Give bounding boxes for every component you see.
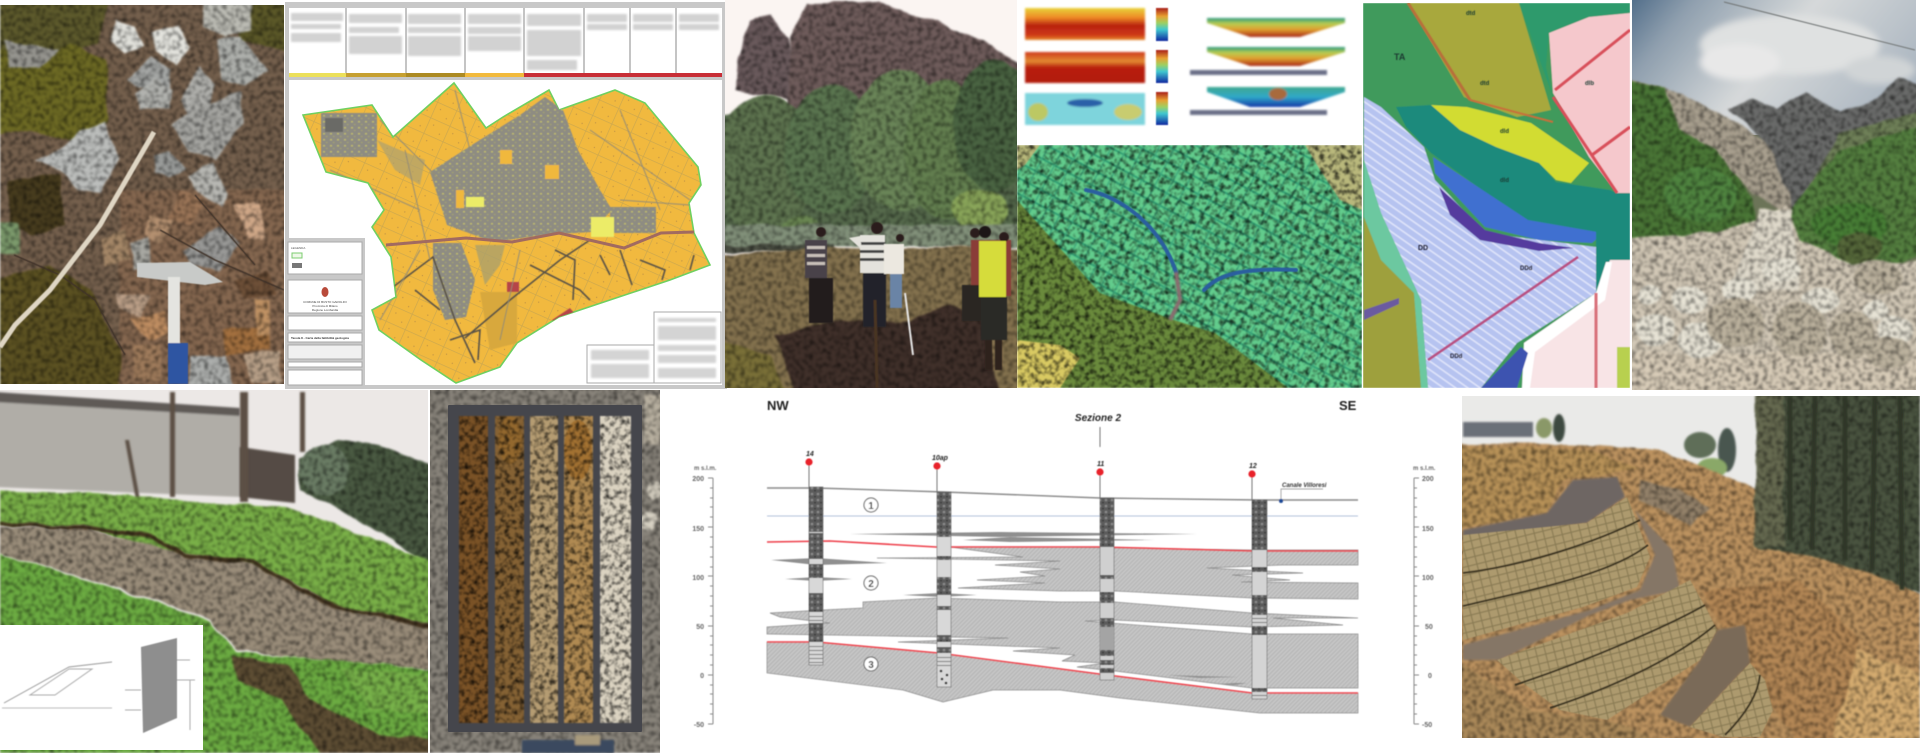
unit labels: DD bbox=[1418, 245, 1428, 252]
left elevation axis: m s.l.m. bbox=[694, 466, 717, 472]
mountain walls bbox=[1632, 76, 1916, 210]
legend table header with eight columns bbox=[289, 8, 722, 77]
fault lines bbox=[1408, 3, 1630, 388]
title block: municipality bbox=[288, 280, 362, 313]
photo: geotextile gabion retaining wall bbox=[1450, 390, 1920, 750]
core box frame bbox=[448, 405, 642, 732]
panel: geological feasibility map bbox=[285, 2, 727, 389]
title block: municipality: Provincia di Milano bbox=[312, 304, 338, 308]
left elevation axis: 100 bbox=[692, 575, 704, 582]
building bbox=[0, 392, 295, 503]
core columns bbox=[459, 416, 631, 723]
borehole 14 bbox=[805, 451, 823, 665]
group behind bbox=[962, 228, 1011, 321]
feasibility class colour strip bbox=[289, 73, 722, 77]
title block: municipality: COMUNE DI BUSTO GAROLFO bbox=[303, 300, 348, 304]
panel: geophysical tomography results bbox=[1017, 4, 1362, 145]
unit labels: dlb bbox=[1585, 81, 1594, 87]
road network bbox=[393, 240, 694, 363]
title block: sheet title: Tavola 8 - Carta della fattibilità geologica bbox=[291, 336, 349, 340]
unit number 2: 2 bbox=[868, 579, 874, 590]
section title and orientation: Sezione 2 bbox=[1075, 413, 1121, 424]
title block: municipality: Regione Lombardia bbox=[312, 308, 338, 312]
photo: field survey team below rock dome bbox=[725, 0, 1017, 388]
lower gabion tier bbox=[1690, 663, 1773, 737]
upper grass bbox=[0, 490, 440, 630]
right elevation axis: 0 bbox=[1428, 673, 1432, 680]
unit labels: dtd bbox=[1480, 81, 1490, 87]
geological hammer bbox=[137, 262, 223, 384]
notes boxes bbox=[587, 312, 721, 383]
surveyors bbox=[805, 222, 1011, 388]
upper gabion tier bbox=[1463, 497, 1650, 640]
central gully bbox=[1170, 272, 1180, 320]
canal label bbox=[1279, 483, 1327, 503]
secondary roads bbox=[330, 90, 690, 340]
canal label: Canale Villoresi bbox=[1282, 483, 1327, 489]
unit labels: DDd bbox=[1450, 354, 1463, 360]
thin lenses bbox=[771, 532, 1247, 685]
panel: topographic map with drainage lines bbox=[1017, 145, 1362, 388]
slump scarp and bare soil bbox=[0, 528, 440, 670]
left elevation axis: 200 bbox=[692, 476, 704, 483]
borehole 14: 14 bbox=[806, 451, 814, 458]
middle gabion tier bbox=[1497, 580, 1717, 720]
forest trunks bbox=[1790, 396, 1902, 590]
rock domes bbox=[734, 0, 1017, 110]
unit labels bbox=[1394, 11, 1594, 360]
lower grass bbox=[0, 550, 440, 753]
branches bbox=[14, 195, 284, 355]
map base colours bbox=[1017, 145, 1362, 388]
main canal line bbox=[386, 232, 694, 248]
right elevation axis: m s.l.m. bbox=[1413, 466, 1436, 472]
unit labels: dld bbox=[1500, 178, 1509, 184]
left elevation axis: 150 bbox=[692, 526, 704, 533]
borehole 12: 12 bbox=[1249, 463, 1257, 470]
surveyor in white shirt bbox=[884, 234, 904, 308]
valley backing bbox=[1726, 135, 1916, 265]
photo: shallow landslide on grassy slope bbox=[0, 390, 440, 753]
map sheet white field bbox=[365, 80, 722, 385]
column text blocks bbox=[291, 13, 719, 70]
geological units bbox=[1363, 3, 1630, 388]
sky bbox=[1462, 396, 1920, 738]
unit number 2 bbox=[864, 576, 878, 590]
sky bbox=[0, 390, 428, 753]
green vegetation bbox=[1623, 78, 1920, 270]
municipal territory map bbox=[303, 83, 710, 383]
borehole 10ap: 10ap bbox=[932, 455, 949, 462]
red stratigraphic boundaries bbox=[767, 541, 1358, 693]
colour scale bars bbox=[1156, 8, 1168, 125]
left elevation axis: -50 bbox=[694, 722, 704, 729]
unit number 3: 3 bbox=[868, 660, 874, 671]
right elevation axis bbox=[1413, 466, 1436, 729]
tomography sections right column bbox=[1190, 18, 1345, 115]
measuring pole bbox=[905, 293, 913, 355]
section title and orientation bbox=[767, 398, 1357, 447]
unit labels: dld bbox=[1500, 129, 1509, 135]
unit number 1: 1 bbox=[868, 501, 874, 512]
map sheet frame bbox=[285, 2, 727, 389]
excavated ground bbox=[1450, 442, 1920, 750]
surveyor in striped shirt, left bbox=[805, 227, 833, 323]
legend box bbox=[288, 242, 362, 274]
borehole 12 bbox=[1248, 463, 1267, 699]
built-up areas bbox=[321, 97, 656, 350]
right elevation axis: 50 bbox=[1425, 624, 1433, 631]
trees on the right bbox=[300, 440, 440, 570]
panel: coloured geological map bbox=[1363, 3, 1630, 388]
unit labels: DDd bbox=[1520, 266, 1533, 272]
forest floor and rocks bbox=[0, 5, 284, 384]
unit labels: TA bbox=[1394, 52, 1406, 62]
borehole 11: 11 bbox=[1097, 461, 1104, 468]
left elevation axis: 50 bbox=[696, 624, 704, 631]
unit labels: dtd bbox=[1466, 11, 1476, 17]
fence posts and trunks bbox=[125, 392, 305, 502]
title block: sheet title bbox=[288, 316, 362, 385]
boulder field bbox=[1623, 205, 1920, 400]
photo: core sample box bbox=[420, 380, 670, 753]
column dividers bbox=[346, 8, 676, 73]
forest on the right bbox=[1755, 390, 1920, 597]
left elevation axis: 0 bbox=[700, 673, 704, 680]
left elevation axis bbox=[692, 466, 717, 729]
borehole 11 bbox=[1096, 461, 1114, 680]
photo: debris channel below mountain peaks bbox=[1620, 0, 1920, 400]
operator's boots bbox=[522, 735, 614, 753]
right elevation axis: 100 bbox=[1422, 575, 1434, 582]
borehole 10ap bbox=[932, 455, 951, 687]
section title and orientation: SE bbox=[1339, 398, 1357, 413]
chart: geological cross-section Sezione 2 bbox=[692, 398, 1436, 729]
unit number 3 bbox=[864, 657, 878, 671]
inset: slope stability diagram bbox=[0, 625, 203, 750]
hatched aquifer layers bbox=[767, 547, 1358, 713]
section title and orientation: NW bbox=[767, 398, 789, 413]
ground and soil pit bbox=[725, 244, 1017, 388]
right elevation axis: 200 bbox=[1422, 476, 1434, 483]
right elevation axis: 150 bbox=[1422, 526, 1434, 533]
surveyor in striped white shirt bbox=[849, 222, 886, 327]
sky bbox=[725, 0, 1017, 256]
cloudy sky bbox=[1632, 0, 1916, 135]
power line bbox=[1724, 2, 1915, 50]
right elevation axis: -50 bbox=[1422, 722, 1432, 729]
surveyor in yellow shirt bbox=[979, 226, 1007, 370]
unit number 1 bbox=[864, 498, 878, 512]
legend box: LEGENDA bbox=[291, 246, 305, 250]
gravel ground bbox=[420, 380, 670, 753]
resistivity maps left column bbox=[1025, 8, 1145, 125]
grey geotextile bench bbox=[1463, 477, 1750, 727]
photo: limestone rocks and geological hammer bbox=[0, 5, 284, 384]
ground surface and water table bbox=[767, 488, 1358, 516]
tree canopy bbox=[715, 60, 1037, 253]
blue drainage lines bbox=[1086, 190, 1296, 290]
white stick bbox=[0, 132, 154, 347]
distant trees and building bbox=[1463, 414, 1736, 478]
